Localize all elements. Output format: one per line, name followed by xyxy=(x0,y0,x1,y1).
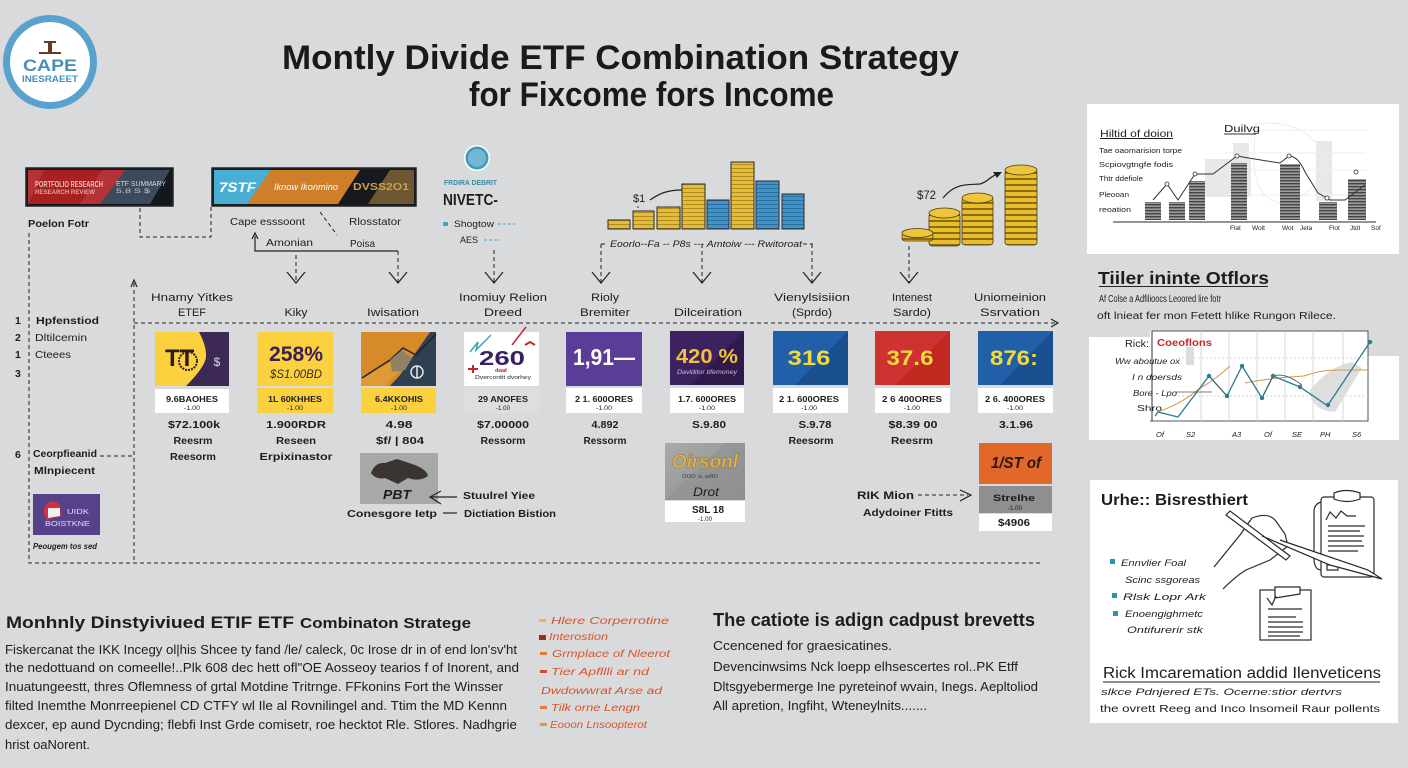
card 5: -1.00 xyxy=(596,405,612,412)
panel: top-right bar and line chart: Hiltid of doion xyxy=(1100,129,1173,140)
card 5: Ressorm xyxy=(584,436,627,447)
labels: ETF banner notes xyxy=(230,216,402,250)
column headers: Inomiuy Relion xyxy=(459,292,547,304)
panel: risk conditions line chart: Of xyxy=(1264,430,1273,439)
label: portfolio: Poelon Fotr xyxy=(28,219,89,230)
text: bottom left body: hrist oaNorent. xyxy=(5,738,90,752)
card 1: $ xyxy=(214,355,221,369)
icon: clipboard small xyxy=(1260,587,1311,640)
column headers: Kiky xyxy=(284,307,308,319)
connector: banners xyxy=(140,207,211,237)
card 8: Reesrm xyxy=(891,436,933,447)
text: bottom left body: filted Inemthe Monrreepienel CD CTFY wl Ile al Rovnilingel and. Ttim the MD Kennn xyxy=(5,699,507,713)
NYETC block xyxy=(443,145,515,245)
text: bottom right body: Devencinwsims Nck loepp elhsescertes rol..PK Etff xyxy=(713,659,1018,674)
arrow: to Dilceiration xyxy=(693,244,711,283)
heading: bottom left xyxy=(6,613,471,632)
panel: top-right bar and line chart: Tae oaomarision torpe xyxy=(1099,146,1182,155)
panel: top-right bar and line chart: Jeta xyxy=(1300,225,1313,232)
text: bottom right body: Dltsgyebermerge Ine pyreteinof wvain, Inegs. Aepltoliod xyxy=(713,679,1038,694)
banner: ETF: Iknow Ikonmino xyxy=(274,182,338,192)
PBT callouts xyxy=(347,490,556,520)
banner: portfolio xyxy=(26,168,173,206)
column headers: Uniomeinion xyxy=(974,292,1046,304)
panel: top-right bar and line chart: Pleooan xyxy=(1099,190,1129,199)
panel: top-right bar and line chart: Flat xyxy=(1230,225,1241,232)
coin callout: $72 xyxy=(917,172,1002,202)
banner: portfolio: PORTFOLIO RESEARCH xyxy=(35,180,103,189)
legend: orange list xyxy=(539,615,671,731)
card 7: 2 1. 600ORES xyxy=(779,394,839,404)
left row labels: Hpfenstiod xyxy=(36,315,99,327)
column headers xyxy=(151,292,1046,319)
banner: ETF: 7STF xyxy=(219,179,256,195)
text: chart description xyxy=(1097,294,1336,322)
chart callout: $1 xyxy=(633,190,682,208)
column headers: Rioly xyxy=(591,292,620,304)
connector: chart axis xyxy=(601,243,813,245)
risk badge caption: Peougem tos sed xyxy=(33,542,98,551)
arrow: to Vienylsisiion xyxy=(803,244,821,283)
panel: risk conditions line chart: SE xyxy=(1292,430,1303,439)
title: Montly Divide ETF Combination Strategy xyxy=(282,39,959,77)
card 5: 2 1. 600ORES xyxy=(575,394,633,404)
text: chart description: oft lnieat fer mon Fetett hlike Rungon Rilece. xyxy=(1097,311,1336,322)
card 7: -1.00 xyxy=(801,405,817,412)
card: PBT: PBT xyxy=(383,487,412,502)
panel: risk conditions line chart: Of xyxy=(1156,430,1165,439)
banner: portfolio: RESEARCH REVIEW xyxy=(35,190,95,196)
panel: top-right bar and line chart: Wot xyxy=(1282,225,1294,232)
card 3: 6.4KKOHIS xyxy=(375,394,423,404)
column headers: Vienylsisiion xyxy=(774,292,850,304)
card 6: 420 % xyxy=(676,346,738,368)
card 3: -1.00 xyxy=(391,405,407,412)
panel: risk conditions line chart: A3 xyxy=(1231,430,1242,439)
column headers: Sardo) xyxy=(893,307,931,319)
text: chart description: Af Colse a Adfilioocs Leoored lire fotr xyxy=(1099,294,1221,305)
labels: ETF banner notes: Poisa xyxy=(350,239,375,250)
arrow: to Rioly xyxy=(592,244,610,283)
arrow: to Intenest xyxy=(900,246,918,283)
banner: ETF: DVSS2O1 xyxy=(353,182,410,193)
bullet list: Rlsk Lopr Ark xyxy=(1123,592,1208,603)
bullet list: Ontifurerir stk xyxy=(1127,625,1205,636)
card 4: Dvercontit dvorhey xyxy=(475,375,531,381)
card 4: -1.00 xyxy=(496,405,510,412)
panel: risk conditions line chart: I n doersds xyxy=(1132,373,1182,382)
bullet list: Ennvlier Foal xyxy=(1121,558,1187,569)
column headers: Dreed xyxy=(484,307,522,319)
card 8 xyxy=(875,331,950,447)
NYETC block: Shogtow xyxy=(454,219,495,229)
card 4: dead xyxy=(495,368,507,374)
text: bottom right body: All apretion, Ingfiht, Wteneylnits....... xyxy=(713,698,927,713)
card: Oirsonl: Oirsonl xyxy=(672,452,739,473)
card: orange: -1.00 xyxy=(1008,506,1023,512)
arrow: to Iwisation xyxy=(389,251,407,283)
chart callout: $1: $1 xyxy=(633,193,645,205)
coin callout: $72: $72 xyxy=(917,190,936,202)
bullet list: Enoengighmetc xyxy=(1125,609,1203,620)
logo badge: INESRAEET xyxy=(22,74,79,84)
heading: bottom right: The catiote is adign cadpust brevetts xyxy=(713,609,1035,630)
panel: top-right bar and line chart xyxy=(1087,104,1399,254)
left component label: Mlnpiecent xyxy=(34,465,96,477)
column headers: Dilceiration xyxy=(674,307,742,319)
card 3: 4.98 xyxy=(386,419,413,431)
risk badge: UIDK xyxy=(67,507,89,516)
card: orange xyxy=(979,443,1052,531)
panel: risk management: slkce Pdnjered ETs. Ocerne:stior dertvrs xyxy=(1101,687,1342,698)
card 1: -1.00 xyxy=(184,405,200,412)
card 2: Erpixinastor xyxy=(260,451,332,463)
card: orange: 1/ST of xyxy=(991,455,1043,472)
card 6: S.9.80 xyxy=(692,419,726,431)
banner: portfolio: 5.8 S $ xyxy=(116,189,151,195)
arrow: diagonal note xyxy=(320,212,337,235)
left row labels: Dltilcemin xyxy=(35,332,87,344)
panel: risk management: Urhe:: Bisresthiert xyxy=(1101,492,1249,509)
card 2: 1.900RDR xyxy=(266,419,327,431)
chart axis labels: Eoorlo--Fa -- P8s --- Amtoiw --- Rwitoroat xyxy=(610,239,803,249)
legend: orange list: Dwdowwrat Arse ad xyxy=(541,685,664,697)
panel: risk conditions line chart: Coeoflons xyxy=(1157,337,1212,349)
column headers: Ssrvation xyxy=(980,307,1040,319)
risk callout: Adydoiner Ftitts xyxy=(863,507,953,519)
risk badge xyxy=(33,494,100,535)
card 8: -1.00 xyxy=(904,405,920,412)
card 5 xyxy=(566,332,642,447)
column headers: Bremiter xyxy=(580,307,630,319)
card: orange: $4906 xyxy=(998,518,1030,529)
left row labels: Cteees xyxy=(35,349,71,361)
panel: risk conditions line chart: Bore - Lpo xyxy=(1133,389,1178,398)
card: Oirsonl: Drot xyxy=(693,485,720,499)
panel: risk management: Rick Imcaremation addid Ilenveticens xyxy=(1103,665,1381,682)
arrow: to Inomiuy xyxy=(485,250,503,283)
heading: Tiiler ininte Otflors: Tiiler ininte Otflors xyxy=(1098,268,1269,288)
legend: orange list: Tier Apfllli ar nd xyxy=(551,666,651,678)
card 5: 4.892 xyxy=(592,419,619,431)
panel: risk conditions line chart: Shro xyxy=(1137,404,1163,413)
icon: clipboard large xyxy=(1314,490,1374,577)
column headers: (Sprdo) xyxy=(792,307,832,319)
card 1: Reesorm xyxy=(170,452,216,463)
card 9: -1.00 xyxy=(1007,405,1023,412)
legend: orange list: Grmplace of Nleerot xyxy=(552,648,671,660)
card 4: 260 xyxy=(479,348,525,370)
icon: coin stacks xyxy=(902,165,1037,246)
logo badge: CAPE xyxy=(23,56,77,75)
risk badge: BOISTKNE xyxy=(45,519,90,528)
panel: risk management: the ovrett Reeg and Inco lnsomeil Raur pollents xyxy=(1100,703,1380,715)
card 2: -1.00 xyxy=(287,405,303,412)
text: bottom right body: Ccencened for graesicatines. xyxy=(713,638,892,653)
heading: bottom left: Monhnly Dinstyiviued ETIF ETF xyxy=(6,613,294,632)
card 7: S.9.78 xyxy=(798,419,832,431)
banner: portfolio: ETF SUMMARY xyxy=(116,181,166,188)
heading: bottom left: Combinaton Strategе xyxy=(300,615,471,632)
title xyxy=(282,39,959,114)
PBT callouts: Dictiation Bistion xyxy=(464,508,556,520)
card 1: Reesrm xyxy=(174,436,213,447)
panel: top-right bar and line chart: Duilvg xyxy=(1224,123,1260,135)
card 2: $S1.00BD xyxy=(269,367,322,381)
left component label: 6 xyxy=(15,449,21,461)
card 1: TT xyxy=(165,345,195,372)
PBT callouts: Stuulrel Yiee xyxy=(463,490,535,502)
NYETC block: NIVETC- xyxy=(443,192,498,209)
panel: risk conditions line chart: S6 xyxy=(1352,430,1362,439)
card 8: 37.6 xyxy=(886,347,934,370)
panel: risk conditions line chart: S2 xyxy=(1186,430,1196,439)
risk callout xyxy=(857,490,971,519)
column headers: Hnamy Yitkes xyxy=(151,292,234,304)
card: PBT xyxy=(360,453,438,504)
panel: top-right bar and line chart: Wolt xyxy=(1252,225,1265,232)
title: for Fixcome fors Income xyxy=(469,76,834,114)
bullet list: Scinc ssgoreas xyxy=(1125,575,1200,586)
card 1: 9.6BAOHES xyxy=(166,394,218,404)
labels: ETF banner notes: Rlosstator xyxy=(349,216,402,228)
banner: ETF xyxy=(212,168,416,206)
text: bottom left body: Inuatungeestt, thres Oflemness of grtal Motdine Tritrnge. FFkonins Fort the Winsser xyxy=(5,680,503,694)
card 8: $8.39 00 xyxy=(888,419,938,431)
left row labels: 2 xyxy=(15,332,21,344)
card: orange: Strelhe xyxy=(993,493,1035,504)
card 6: Daviditor tifemoney xyxy=(677,370,738,376)
card 2: 1L 60KHHES xyxy=(268,394,322,404)
card: Oirsonl: S8L 18 xyxy=(692,505,724,516)
card 6: 1.7. 600ORES xyxy=(678,394,736,404)
card 1: $72.100k xyxy=(168,419,220,431)
card 4 xyxy=(464,327,539,447)
NYETC block: AES xyxy=(460,235,478,245)
card 7: Reesorm xyxy=(788,436,834,447)
panel: top-right bar and line chart: Jtdl xyxy=(1350,225,1361,232)
legend: orange list: Tilk orne Lengn xyxy=(551,702,640,714)
PBT callouts: Conesgore Ietp xyxy=(347,508,437,520)
icon: hand and pen xyxy=(1214,511,1382,589)
card 9: 3.1.96 xyxy=(999,419,1033,431)
card 6 xyxy=(670,331,744,431)
text: bottom left body xyxy=(5,643,519,752)
left component label xyxy=(15,448,132,477)
card 7 xyxy=(773,331,848,447)
left framework axes xyxy=(29,233,1040,563)
left row labels: 1 xyxy=(15,349,21,361)
logo badge xyxy=(3,15,97,109)
card 4: $7.00000 xyxy=(477,419,529,431)
column headers: Iwisation xyxy=(367,307,419,319)
panel: risk management xyxy=(1090,480,1398,723)
panel: top-right bar and line chart: Thtr ddefiole xyxy=(1099,174,1143,183)
connector: note bracket xyxy=(252,233,398,251)
text: bottom left body: Fiskercanat the IKK Incegy ol|his Shcee ty fand /le/ caleck, 0c Irose dr in of end lon'sv'ht xyxy=(5,643,518,657)
panel: risk conditions line chart xyxy=(1089,331,1399,440)
panel: top-right bar and line chart: reoation xyxy=(1099,205,1131,214)
card 8: 2 6 400ORES xyxy=(882,394,942,404)
arrow: to Kiky xyxy=(287,255,305,283)
card 3: $f/ | 804 xyxy=(376,436,425,447)
left row labels: 3 xyxy=(15,368,21,380)
labels: ETF banner notes: Cape esssoont xyxy=(230,216,305,228)
panel: top-right bar and line chart: Flot xyxy=(1329,225,1340,232)
card 9 xyxy=(978,331,1053,431)
legend: orange list: Eooon Lnsoopterot xyxy=(550,719,648,731)
NYETC block: FRDIRA DEBRIT xyxy=(444,178,497,187)
card 6: -1.00 xyxy=(699,405,715,412)
card: Oirsonl xyxy=(665,443,745,523)
card 2: Reseen xyxy=(276,436,316,447)
left row labels xyxy=(15,315,99,380)
card 1 xyxy=(155,332,229,463)
card 2: 258% xyxy=(269,343,323,366)
timeline arrow xyxy=(134,319,1058,327)
card: Oirsonl: -1.00 xyxy=(698,517,713,523)
text: bottom right body xyxy=(713,638,1038,713)
left row labels: 1 xyxy=(15,315,21,327)
column headers: Intenest xyxy=(892,292,932,304)
panel: top-right bar and line chart: Scpiovgtngfe fodis xyxy=(1099,160,1173,169)
labels: ETF banner notes: Amonian xyxy=(266,237,313,249)
left component label: Ceorpfieanid xyxy=(33,448,97,460)
card 3 xyxy=(361,332,436,447)
bar chart: gold and blue bars xyxy=(608,162,804,229)
card 9: 2 6. 400ORES xyxy=(985,394,1045,404)
panel: risk conditions line chart: Ww aboutue ox xyxy=(1115,357,1181,366)
legend: orange list: Hlere Corperrotine xyxy=(551,615,669,627)
panel: risk conditions line chart: Rick: xyxy=(1125,338,1149,350)
panel: top-right bar and line chart: Sof xyxy=(1371,225,1381,232)
card 7: 316 xyxy=(788,347,830,370)
card 4: 29 ANOFES xyxy=(478,394,528,404)
card 5: 1,91— xyxy=(573,344,635,370)
column headers: ETEF xyxy=(178,307,206,319)
text: bottom left body: dexcer, ep aund Dycnding; flebfi Inst Grde comisetr, roe hecktot Rle. Stlores. Nadhgrie xyxy=(5,718,517,732)
card 9: 876: xyxy=(990,347,1038,370)
legend: orange list: Interostion xyxy=(549,631,608,643)
panel: risk conditions line chart: PH xyxy=(1320,430,1331,439)
bullet list xyxy=(1110,558,1208,636)
card 2 xyxy=(257,332,333,463)
risk callout: RIK Mion xyxy=(857,490,914,502)
card: Oirsonl: 000 s.aff0 xyxy=(682,474,718,480)
text: bottom left body: the nedottuand on comeelle!..Plk 608 dec hett ofl"OE Aosseoy tearios f of Inorent, and xyxy=(5,661,519,675)
card 4: Ressorm xyxy=(480,436,526,447)
